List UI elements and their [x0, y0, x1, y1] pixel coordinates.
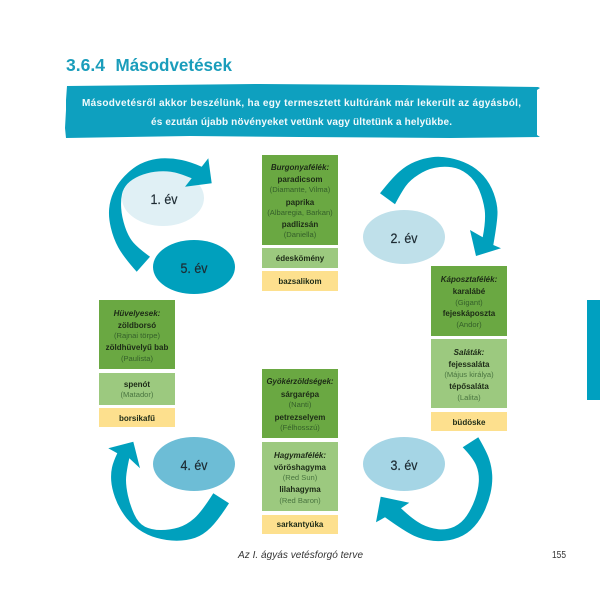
panel: year 2 crops: büdöske [453, 418, 486, 427]
panel: year 3 crops: Hagymafélék: [274, 451, 326, 460]
title: 3.6.4 [66, 55, 105, 75]
panel: year 1 crops: édeskömény [276, 254, 325, 263]
panel: year 2 crops: fejeskáposzta [443, 309, 496, 318]
banner: definition: Másodvetésről akkor beszélünk, ha egy termesztett kultúránk már lekerült az ágyásból, [82, 98, 521, 109]
year 5 ellipse [153, 240, 235, 294]
panel: year 3 crops: (Nanti) [289, 400, 312, 409]
panel: year 3 crops: Gyökérzöldségek: [266, 377, 334, 386]
panel: year 3 crops: petrezselyem [275, 413, 325, 422]
panel: year 2 crops [431, 266, 507, 431]
panel: year 1 crops [262, 155, 338, 291]
panel: year 4 crops: borsikafű [119, 414, 155, 423]
panel: year 2 crops: (Lalita) [457, 393, 481, 402]
panel: year 4 crops [99, 300, 175, 427]
arrow: year 4 cycle [108, 442, 229, 541]
year 1 ellipse [122, 170, 204, 226]
year 2 ellipse [363, 210, 445, 264]
banner: definition [65, 84, 540, 138]
caption: Az I. ágyás vetésforgó terve [237, 550, 363, 561]
panel: year 3 crops: lilahagyma [279, 485, 321, 494]
year 2 ellipse: 2. év [390, 230, 418, 246]
panel: year 1 crops: paprika [286, 198, 315, 207]
arrow: year 3 cycle [376, 437, 492, 541]
panel: year 4 crops: zöldhüvelyű bab [106, 343, 168, 352]
panel: year 4 crops: Hüvelyesek: [114, 309, 161, 318]
arrow: year 1 cycle [109, 158, 212, 272]
panel: year 1 crops: (Daniella) [284, 230, 317, 239]
year 3 ellipse [363, 437, 445, 491]
arrow: year 2 cycle [380, 157, 501, 256]
banner: definition: és ezután újabb növényeket vetünk vagy ültetünk a helyükbe. [151, 117, 452, 128]
panel: year 2 crops: karalábé [453, 287, 486, 296]
panel: year 3 crops: (Red Sun) [283, 473, 318, 482]
panel: year 2 crops: fejessaláta [449, 360, 490, 369]
panel: year 2 crops: tépősaláta [449, 382, 489, 391]
year 4 ellipse: 4. év [180, 457, 208, 473]
panel: year 4 crops: (Paulista) [121, 354, 154, 363]
side tab [587, 300, 600, 400]
year 3 ellipse: 3. év [390, 457, 418, 473]
title: Másodvetések [116, 55, 232, 75]
panel: year 3 crops: sárgarépa [281, 390, 320, 399]
panel: year 1 crops: Burgonyafélék: [271, 163, 329, 172]
page number: 155 [552, 550, 566, 561]
panel: year 1 crops: (Diamante, Vilma) [270, 185, 331, 194]
panel: year 4 crops: spenót [124, 380, 150, 389]
panel: year 1 crops: padlizsán [282, 220, 318, 229]
year 5 ellipse: 5. év [180, 260, 208, 276]
panel: year 1 crops: paradicsom [278, 175, 322, 184]
year 1 ellipse: 1. év [150, 191, 178, 207]
year 4 ellipse [153, 437, 235, 491]
panel: year 4 crops: (Rajnai törpe) [114, 331, 160, 340]
panel: year 2 crops: (Andor) [456, 320, 482, 329]
panel: year 3 crops: vöröshagyma [274, 463, 327, 472]
panel: year 3 crops: (Red Baron) [279, 496, 321, 505]
panel: year 2 crops: Káposztafélék: [441, 275, 498, 284]
panel: year 4 crops: (Matador) [121, 390, 154, 399]
panel: year 1 crops: bazsalikom [278, 277, 322, 286]
panel: year 4 crops: zöldborsó [118, 321, 156, 330]
panel: year 2 crops: (Május királya) [444, 370, 494, 379]
panel: year 3 crops: sarkantyúka [277, 520, 324, 529]
panel: year 3 crops [262, 369, 338, 534]
panel: year 2 crops: (Gigant) [455, 298, 483, 307]
panel: year 3 crops: (Félhosszú) [280, 423, 320, 432]
title [66, 55, 232, 75]
panel: year 1 crops: (Albaregia, Barkan) [267, 208, 333, 217]
panel: year 2 crops: Saláták: [454, 348, 485, 357]
